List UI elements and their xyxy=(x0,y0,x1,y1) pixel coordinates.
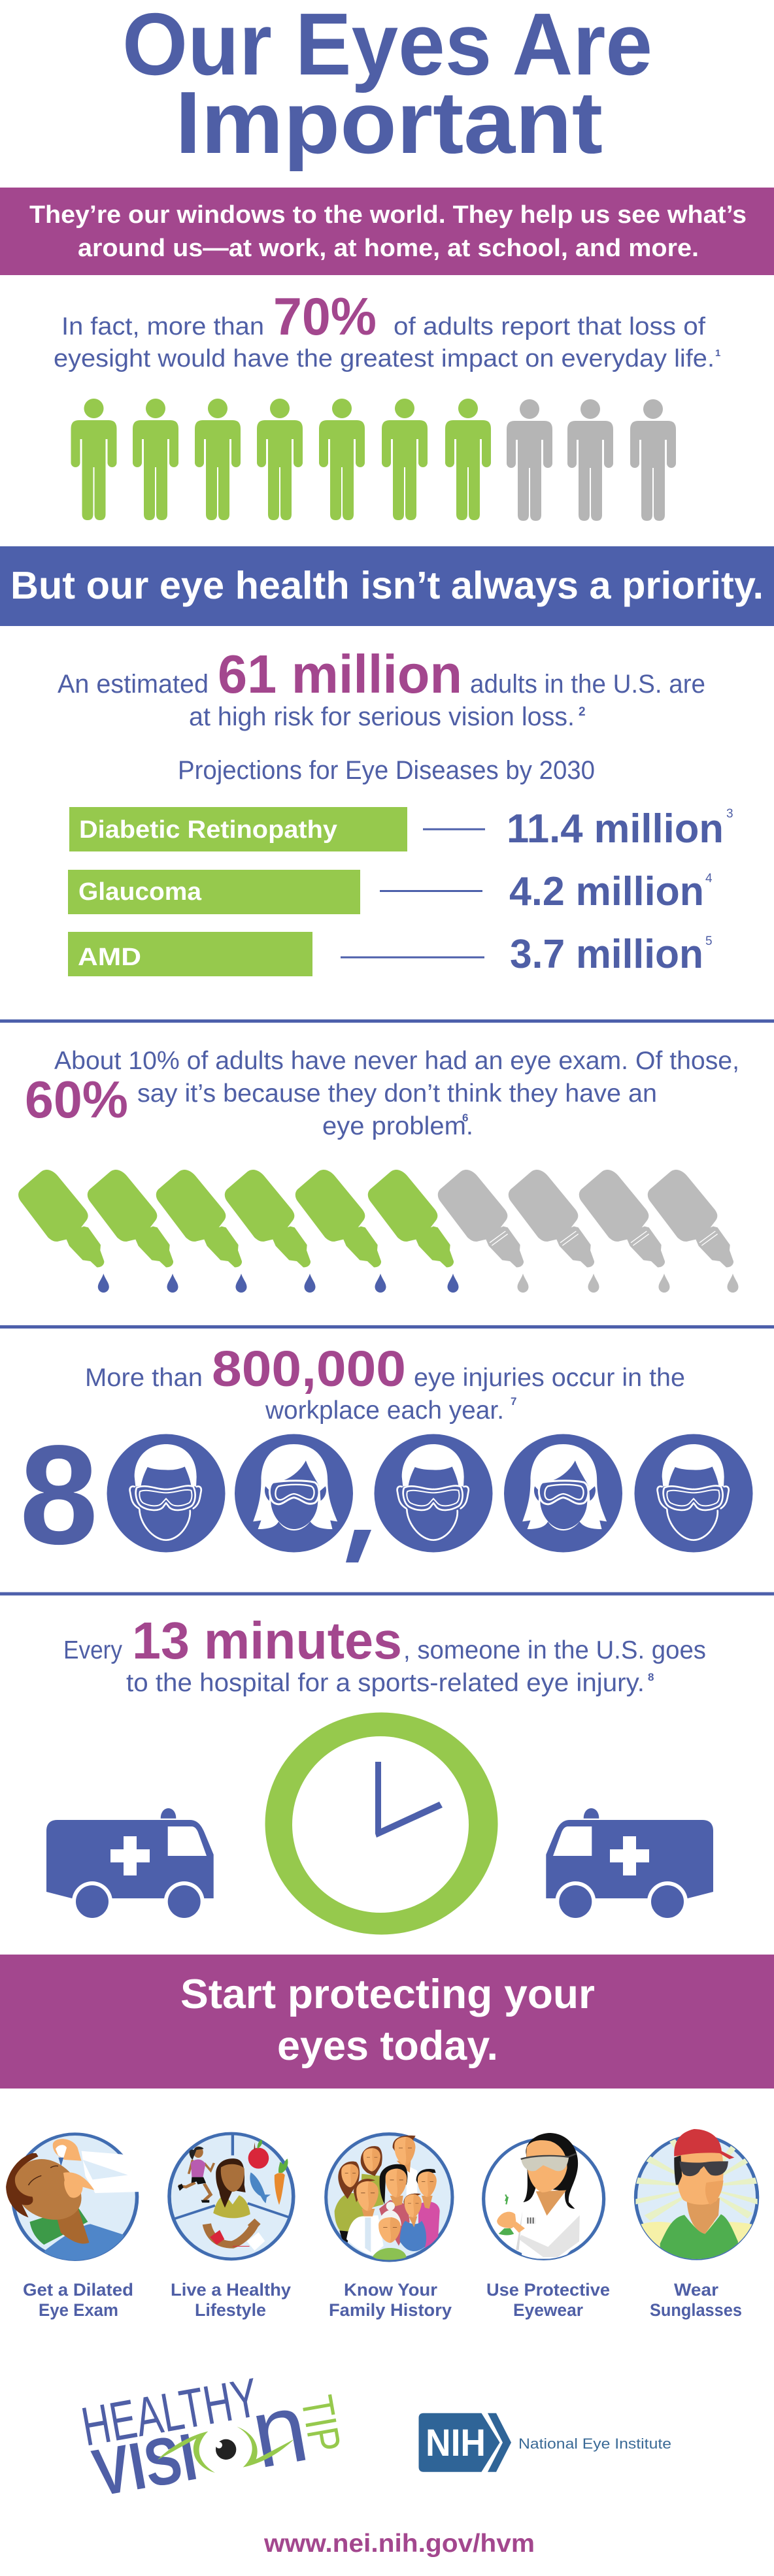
text block: 61 million statistic: adults in the U.S. are xyxy=(470,670,705,699)
logo: Healthy Vision Tip: VISI xyxy=(88,2419,202,2511)
text block: 61 million statistic xyxy=(58,644,705,731)
bar: AMD: 5 xyxy=(705,934,713,948)
text block: 13 minutes statistic: 8 xyxy=(648,1671,654,1683)
banner: windows to the world: They’re our windows to the world. They help us see what’s xyxy=(29,201,747,229)
label: Wear xyxy=(674,2280,718,2300)
banner: eye health priority xyxy=(0,546,774,626)
logo: NIH National Eye Institute: National Eye Institute xyxy=(518,2436,671,2452)
icon: female goggles face xyxy=(235,1434,353,1553)
banner: start protecting: eyes today. xyxy=(277,2023,498,2069)
graphic: 800,000 built from safety goggle faces xyxy=(20,1415,753,1574)
label: Sunglasses xyxy=(650,2300,742,2320)
text block: 800,000 statistic: 800,000 xyxy=(212,1341,406,1397)
icon: clock xyxy=(265,1712,498,1934)
logo: Healthy Vision Tip xyxy=(77,2366,350,2511)
bar: glaucoma: 4 xyxy=(705,872,713,885)
label xyxy=(486,2280,610,2320)
text block: 60 percent statistic xyxy=(25,1047,739,1140)
text block: 800,000 statistic: More than xyxy=(85,1364,203,1392)
illustration: family group xyxy=(326,2134,452,2262)
text block: 61 million statistic: at high risk for serious vision loss. xyxy=(189,702,575,731)
text block: 60 percent statistic: say it’s because they don’t think they have an xyxy=(137,1080,657,1108)
icon: gray bottles xyxy=(438,1170,733,1267)
label xyxy=(23,2280,133,2320)
panel: know your family history xyxy=(326,2134,452,2320)
text block: 70 percent statistic: eyesight would have the greatest impact on everyday life. xyxy=(54,345,715,372)
text block: 60 percent statistic: 60% xyxy=(25,1070,128,1129)
bar: diabetic retinopathy: Diabetic Retinopathy xyxy=(79,816,337,844)
icon: gray people xyxy=(507,399,676,521)
text block: 13 minutes statistic: , someone in the U.S. goes xyxy=(403,1636,706,1664)
text block: 70 percent statistic xyxy=(54,288,720,372)
title xyxy=(122,0,652,172)
text block: 60 percent statistic: 6 xyxy=(462,1112,468,1124)
panel: live a healthy lifestyle xyxy=(169,2134,294,2320)
logo: Healthy Vision Tip: TIP xyxy=(292,2392,350,2456)
icon: male goggles face xyxy=(634,1434,753,1553)
label: Lifestyle xyxy=(195,2300,266,2320)
chart: ten eye-drop bottles, six green xyxy=(18,1170,739,1293)
text block: 60 percent statistic: About 10% of adults have never had an eye exam. Of those, xyxy=(54,1047,739,1075)
banner: eye health priority: But our eye health isn’t always a priority. xyxy=(10,564,764,607)
illustration: man receiving eye drops xyxy=(6,2133,141,2263)
panel: get a dilated eye exam xyxy=(6,2133,141,2320)
icon: blue drops xyxy=(98,1274,459,1293)
banner: start protecting xyxy=(0,1955,774,2089)
icon: left ambulance xyxy=(46,1808,214,1922)
bar: diabetic retinopathy: 3 xyxy=(726,807,733,821)
text block: 800,000 statistic: workplace each year. xyxy=(265,1396,504,1425)
illustration: exercise, food and blood pressure xyxy=(169,2134,294,2259)
label xyxy=(329,2280,452,2320)
icon: male goggles face xyxy=(107,1434,225,1553)
big digit 8: 8 xyxy=(20,1415,98,1574)
label: Know Your xyxy=(344,2280,437,2300)
bar: AMD xyxy=(68,932,713,977)
label xyxy=(171,2280,291,2320)
text block: 70 percent statistic: of adults report that loss of xyxy=(394,313,705,340)
bar: diabetic retinopathy xyxy=(69,806,733,851)
text block: 13 minutes statistic: Every xyxy=(63,1636,122,1664)
label: Use Protective xyxy=(486,2280,610,2300)
text block: 60 percent statistic: eye problem. xyxy=(322,1112,473,1140)
text block: 800,000 statistic: eye injuries occur in the xyxy=(414,1364,685,1392)
label: Family History xyxy=(329,2300,452,2320)
text block: 61 million statistic: 61 million xyxy=(218,644,462,704)
bar: diabetic retinopathy: 11.4 million xyxy=(507,806,724,851)
label: Eye Exam xyxy=(39,2300,118,2320)
website url: www.nei.nih.gov/hvm xyxy=(263,2530,535,2558)
bar: AMD: 3.7 million xyxy=(510,932,703,977)
label: Get a Dilated xyxy=(23,2280,133,2300)
icon: green people xyxy=(71,399,491,520)
title: Important xyxy=(175,73,603,172)
logo: NIH National Eye Institute: NIH xyxy=(426,2422,486,2464)
text block: 800,000 statistic xyxy=(85,1341,685,1425)
heading: projections: Projections for Eye Diseases by 2030 xyxy=(178,756,595,785)
bar: glaucoma: 4.2 million xyxy=(509,869,704,914)
icon: green bottles xyxy=(18,1170,454,1267)
panel: use protective eyewear xyxy=(484,2133,610,2320)
logo: NIH National Eye Institute xyxy=(418,2413,671,2472)
icon: female goggles face xyxy=(504,1434,622,1553)
text block: 70 percent statistic: 1 xyxy=(715,348,720,359)
panel: wear sunglasses xyxy=(635,2129,760,2320)
logo: Healthy Vision Tip: n xyxy=(243,2371,315,2489)
banner: windows to the world xyxy=(0,188,774,275)
icon: male goggles face xyxy=(374,1434,493,1553)
icon: right ambulance xyxy=(546,1808,713,1922)
label: Live a Healthy xyxy=(171,2280,291,2300)
comma xyxy=(346,1530,371,1562)
bar: AMD: AMD xyxy=(78,944,141,971)
label xyxy=(650,2280,742,2320)
label: Eyewear xyxy=(513,2300,583,2320)
text block: 13 minutes statistic: to the hospital for a sports-related eye injury. xyxy=(126,1669,645,1697)
text block: 61 million statistic: An estimated xyxy=(58,670,209,699)
chart: ten people, seven green xyxy=(71,399,676,521)
illustration: lab worker with goggles xyxy=(484,2133,604,2259)
text block: 70 percent statistic: 70% xyxy=(273,288,377,346)
text block: 13 minutes statistic: 13 minutes xyxy=(132,1611,402,1670)
text block: 70 percent statistic: In fact, more than xyxy=(61,313,264,340)
logo: Healthy Vision Tip: HEALTHY xyxy=(77,2366,263,2458)
banner: windows to the world: around us—at work, at home, at school, and more. xyxy=(78,235,699,262)
bar chart: eye disease projections xyxy=(68,806,733,977)
icon: gray drops xyxy=(518,1274,739,1293)
text block: 800,000 statistic: 7 xyxy=(511,1395,516,1408)
text block: 61 million statistic: 2 xyxy=(579,705,586,719)
bar: glaucoma: Glaucoma xyxy=(78,878,202,906)
illustration: person in cap and sunglasses xyxy=(635,2129,760,2261)
bar: glaucoma xyxy=(68,869,713,914)
banner: start protecting: Start protecting your xyxy=(180,1972,595,2017)
text block: 13 minutes statistic xyxy=(63,1611,706,1697)
